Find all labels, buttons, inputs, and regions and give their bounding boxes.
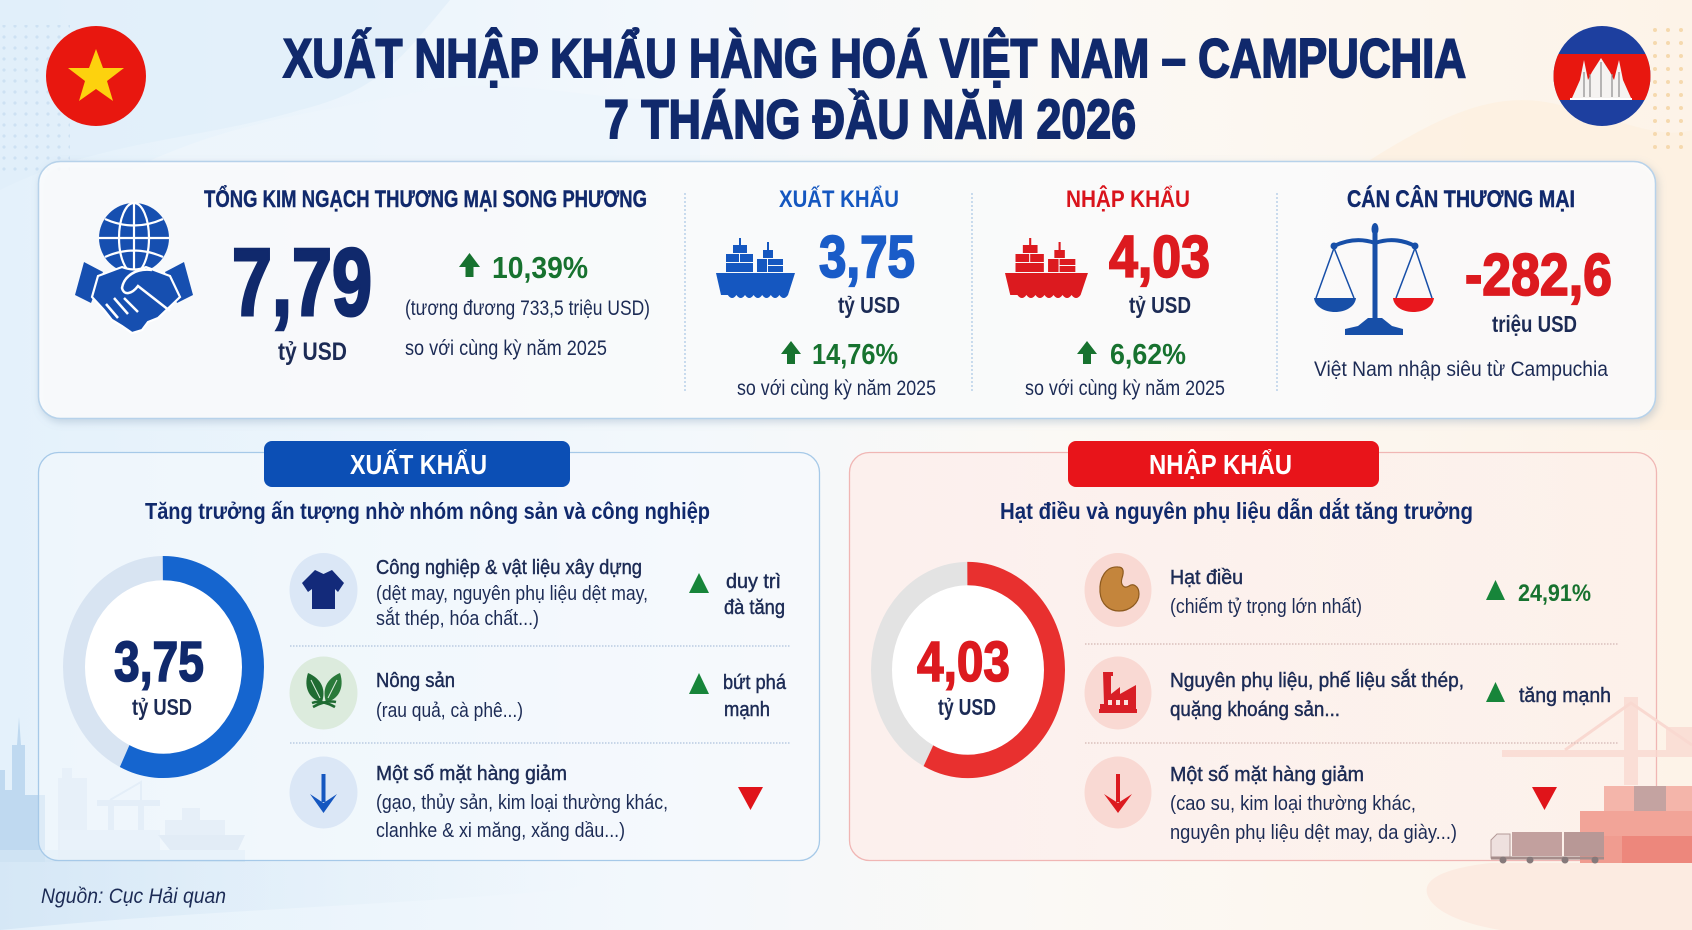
- section: total trade: TỔNG KIM NGẠCH THƯƠNG MẠI SONG PHƯƠNG: [204, 185, 647, 213]
- unit: tỷ USD: [1129, 292, 1191, 318]
- panel: exports detail: [38, 441, 820, 860]
- title: [283, 27, 1466, 150]
- heading badge: imports: [1068, 441, 1379, 487]
- row: raw materials: Nguyên phụ liệu, phế liệu sắt thép,: [1170, 669, 1464, 692]
- icon: factory: [1084, 656, 1152, 730]
- subheading: Hạt điều và nguyên phụ liệu dẫn dắt tăng trưởng: [1000, 497, 1473, 524]
- section: total trade: [75, 185, 650, 366]
- note: comparison: so với cùng kỳ năm 2025: [405, 337, 607, 360]
- heading badge: imports: NHẬP KHẨU: [1149, 449, 1292, 480]
- note: comparison: so với cùng kỳ năm 2025: [1025, 377, 1225, 400]
- row: declining items: nguyên phụ liệu dệt may, da giày...): [1170, 822, 1457, 844]
- row: industry: (dệt may, nguyên phụ liệu dệt may,: [376, 583, 648, 605]
- panel: imports detail: [41, 441, 1692, 908]
- donut chart: exports: tỷ USD: [132, 694, 192, 720]
- icon: down arrow: [1084, 756, 1152, 828]
- row: cashew: Hạt điều: [1170, 566, 1243, 589]
- row: raw materials: [1084, 656, 1611, 730]
- unit: tỷ USD: [278, 338, 347, 366]
- icon: balance scale: [1314, 223, 1434, 335]
- flag: Cambodia: [1550, 26, 1654, 126]
- trend: 24,91%: [1486, 580, 1591, 607]
- donut chart: exports: 3,75: [114, 630, 204, 694]
- trend: sustained growth: [689, 570, 785, 619]
- section: trade balance: [1314, 185, 1612, 381]
- row: declining items: Một số mặt hàng giảm: [376, 762, 567, 785]
- trend: strong increase: tăng mạnh: [1519, 684, 1611, 707]
- trend: breakthrough: mạnh: [724, 698, 770, 721]
- unit: triệu USD: [1492, 311, 1577, 337]
- icon: down arrow: [290, 756, 358, 828]
- row: agriculture: Nông sản: [376, 669, 455, 692]
- row: agriculture: [290, 656, 787, 730]
- trend: breakthrough: bứt phá: [723, 671, 787, 694]
- value: 3,75: 3,75: [819, 224, 915, 290]
- row: industry: Công nghiệp & vật liệu xây dựng: [376, 556, 642, 579]
- icon: globe and handshake: [75, 203, 193, 333]
- note: trade deficit: Việt Nam nhập siêu từ Campuchia: [1314, 358, 1608, 381]
- row: declining items: [290, 756, 763, 842]
- row: declining items: (gạo, thủy sản, kim loại thường khác,: [376, 792, 668, 814]
- flag: Vietnam: [46, 26, 146, 126]
- trend: 24,91%: 24,91%: [1518, 580, 1591, 607]
- heading badge: exports: [264, 441, 570, 487]
- row: industry: [290, 553, 785, 630]
- row: cashew: (chiếm tỷ trọng lớn nhất): [1170, 596, 1362, 618]
- value: -282,6: -282,6: [1465, 242, 1612, 308]
- value: 7,79: 7,79: [232, 229, 372, 336]
- panel: summary: [38, 162, 1656, 418]
- illustration: city skyline and port: [0, 717, 245, 862]
- trend: sustained growth: duy trì: [726, 570, 781, 593]
- growth: 6,62%: [1077, 339, 1186, 371]
- icon: Angkor Wat: [1570, 58, 1632, 100]
- icon: t-shirt: [290, 553, 358, 627]
- heading badge: exports: XUẤT KHẨU: [350, 449, 487, 480]
- growth: 14,76%: 14,76%: [812, 339, 898, 371]
- trend: decrease: [1532, 787, 1557, 810]
- section: exports: [716, 185, 936, 400]
- row: agriculture: (rau quả, cà phê...): [376, 700, 523, 722]
- growth: 14,76%: [781, 339, 898, 371]
- growth: 10,39%: 10,39%: [492, 250, 588, 285]
- trend: strong increase: [1486, 682, 1611, 707]
- donut chart: imports: tỷ USD: [938, 694, 996, 720]
- growth: 10,39%: [459, 250, 588, 285]
- row: declining items: (cao su, kim loại thường khác,: [1170, 793, 1416, 815]
- trend: decrease: [738, 787, 763, 810]
- icon: blue cargo ship: [716, 238, 795, 298]
- icon: cashew nut: [1084, 553, 1152, 627]
- growth: 6,62%: 6,62%: [1110, 339, 1186, 371]
- title: 7 THÁNG ĐẦU NĂM 2026: [604, 88, 1136, 150]
- section: trade balance: CÁN CÂN THƯƠNG MẠI: [1347, 185, 1575, 213]
- note: equivalent value: (tương đương 733,5 triệu USD): [405, 297, 650, 320]
- unit: tỷ USD: [838, 292, 900, 318]
- note: comparison: so với cùng kỳ năm 2025: [737, 377, 936, 400]
- section: exports: XUẤT KHẨU: [779, 185, 899, 213]
- donut chart: imports: 4,03: [917, 630, 1010, 694]
- row: industry: sắt thép, hóa chất...): [376, 607, 539, 630]
- trend: breakthrough: [689, 671, 787, 721]
- row: raw materials: quặng khoáng sản...: [1170, 698, 1340, 721]
- section: imports: NHẬP KHẨU: [1066, 185, 1190, 213]
- donut chart: exports: [74, 568, 253, 766]
- icon: red cargo ship: [1005, 238, 1088, 298]
- source note: Nguồn: Cục Hải quan: [41, 885, 226, 908]
- subheading: Tăng trưởng ấn tượng nhờ nhóm nông sản và công nghiệp: [145, 498, 710, 524]
- illustration: cranes and containers: [1491, 697, 1692, 864]
- donut chart: imports: [882, 574, 1054, 766]
- trend: sustained growth: đà tăng: [724, 596, 785, 619]
- section: imports: [1005, 185, 1225, 400]
- row: cashew: [1084, 553, 1591, 627]
- value: 4,03: 4,03: [1109, 224, 1210, 290]
- icon: leaves: [290, 656, 358, 730]
- row: declining items: [1084, 756, 1557, 844]
- row: declining items: Một số mặt hàng giảm: [1170, 763, 1364, 786]
- row: declining items: clanhke & xi măng, xăng dầu...): [376, 820, 625, 842]
